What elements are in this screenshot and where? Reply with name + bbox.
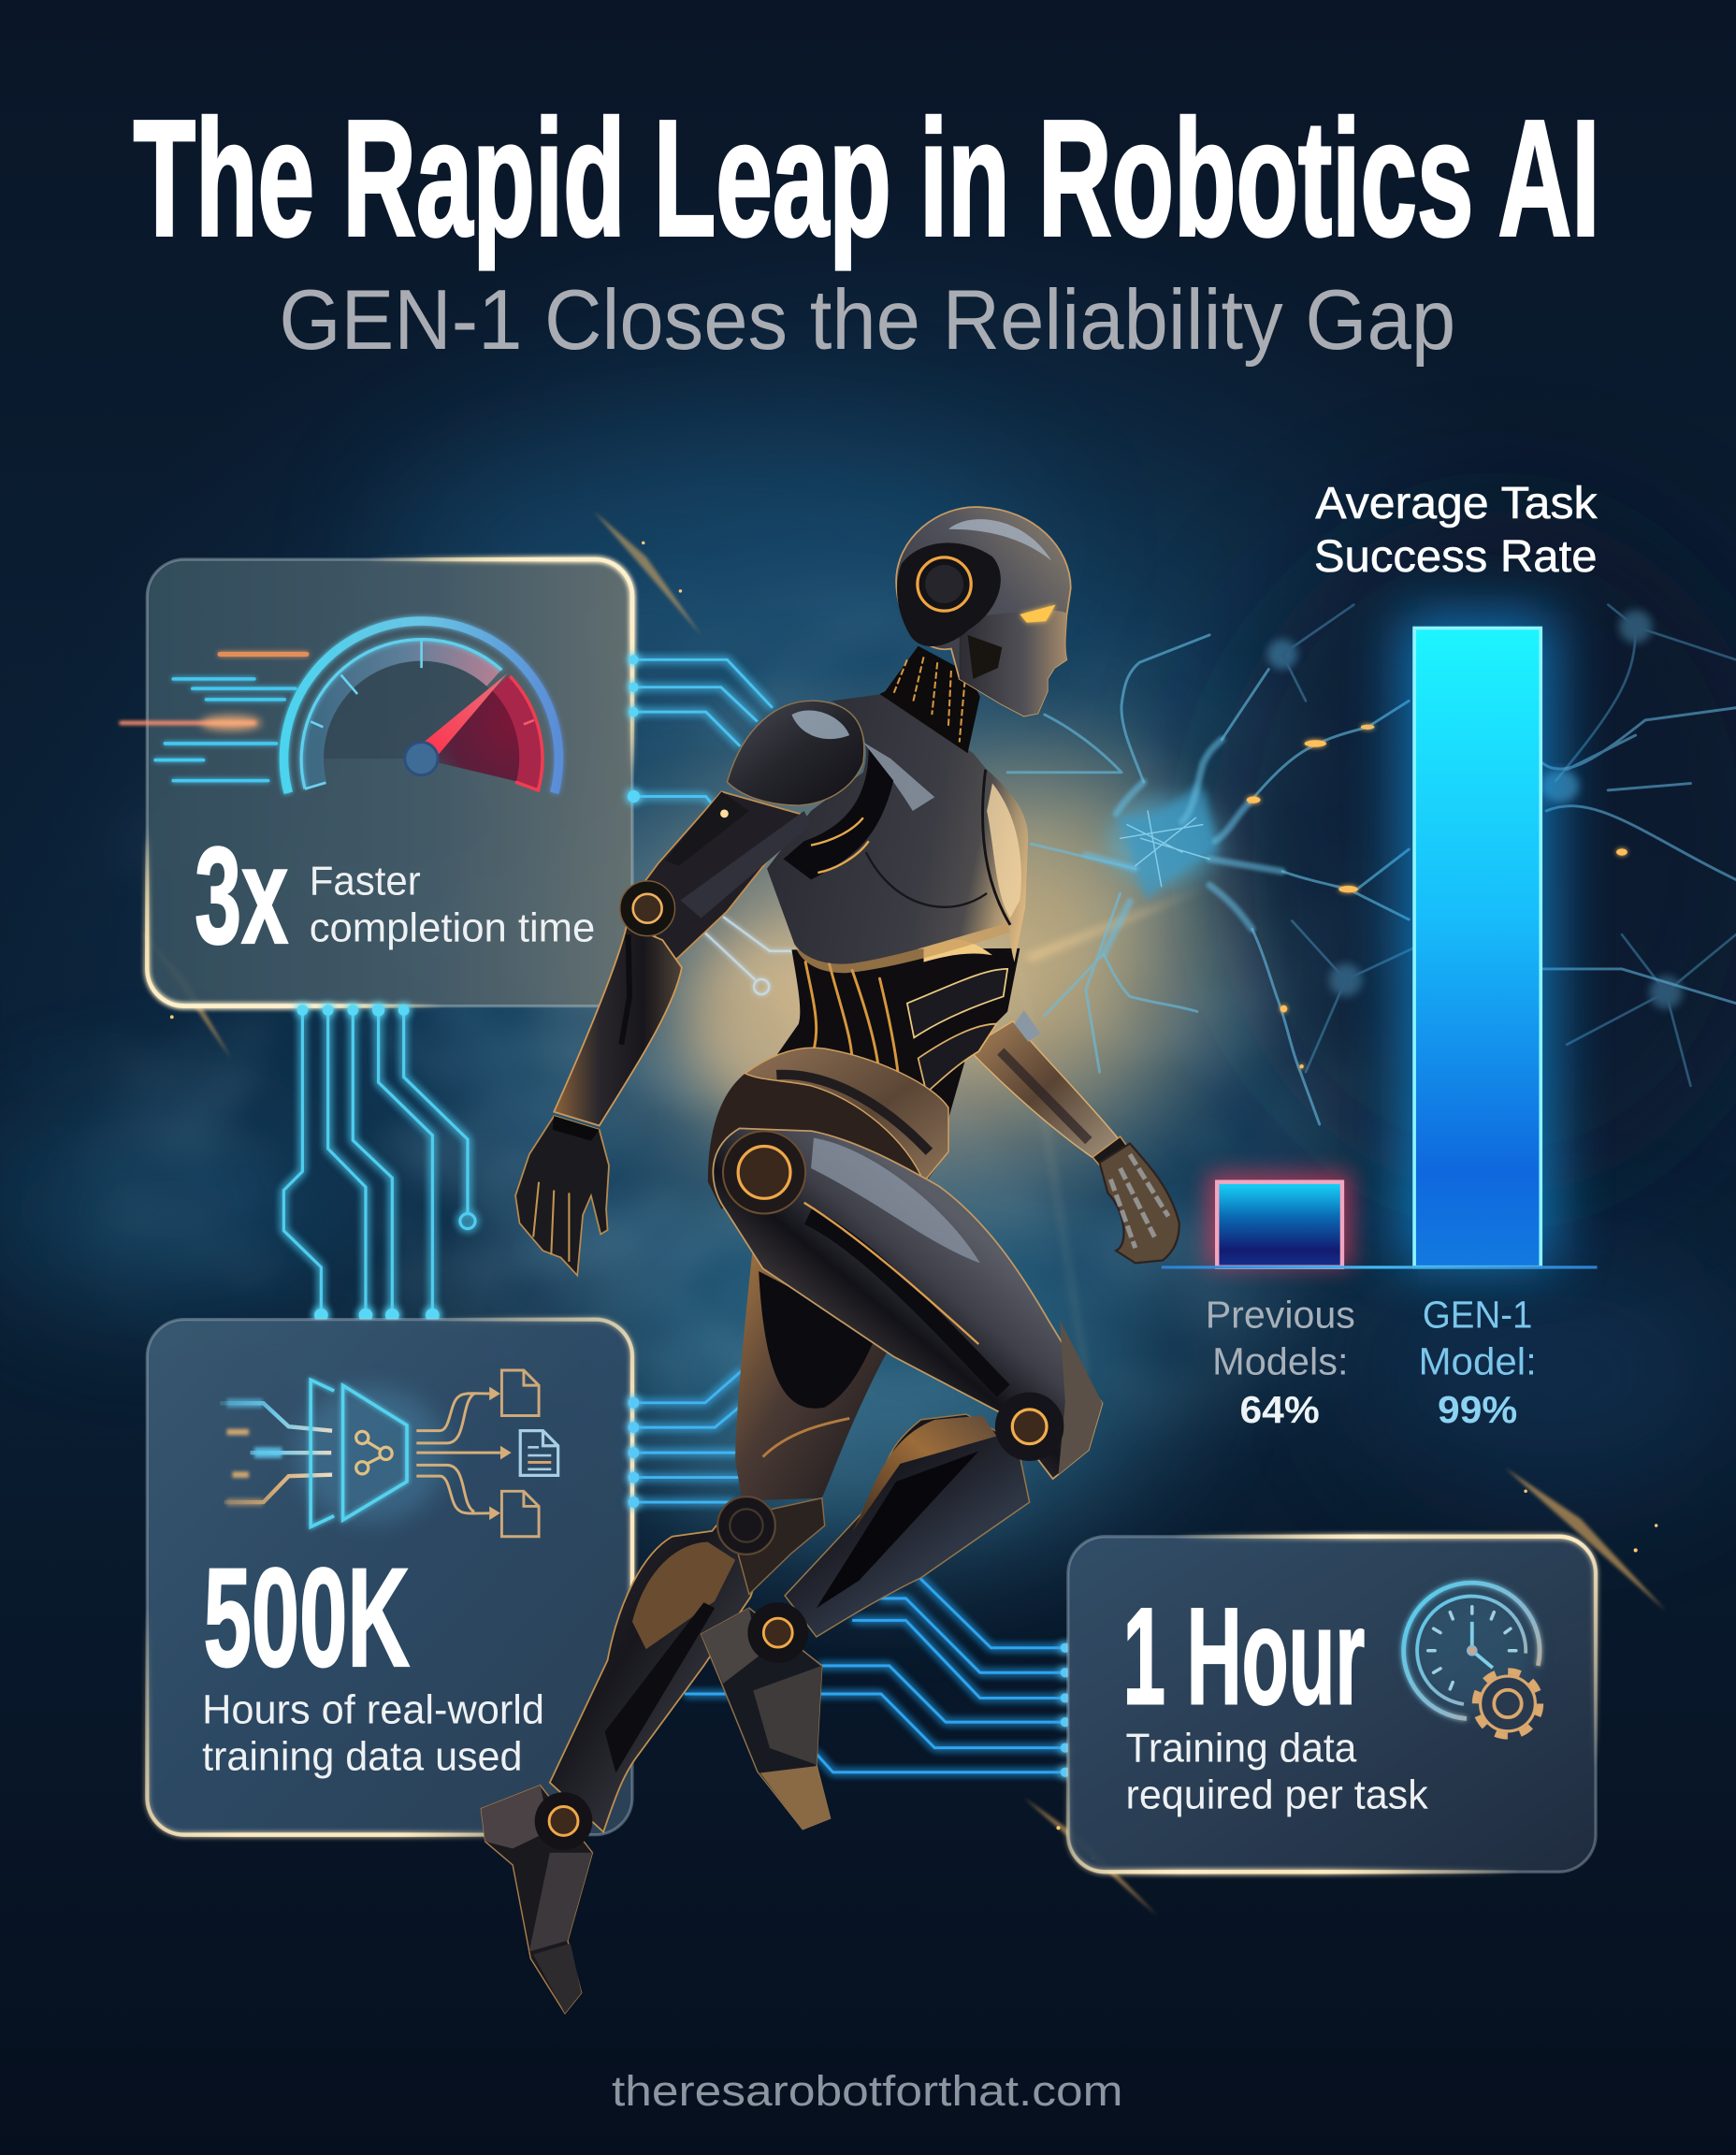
neuron: right of bar [1541, 708, 1736, 1004]
robot: ankle joint [747, 1602, 808, 1663]
footer url: theresarobotforthat.com [612, 2067, 1123, 2115]
label: hours of real-world training data: training data used [202, 1735, 522, 1780]
label: GEN-1 model: 99% [1438, 1388, 1517, 1431]
panel: 3x faster [121, 559, 632, 1006]
label: GEN-1 model: Model: [1418, 1339, 1537, 1382]
neuron sparks [1247, 725, 1628, 1068]
robot: knee joint [995, 1392, 1063, 1461]
label: faster completion time: Faster [310, 860, 421, 904]
label: previous models: Models: [1212, 1339, 1349, 1382]
icon: speedometer [284, 621, 558, 793]
robot: glowing eye [1020, 605, 1056, 623]
subtitle: GEN-1 Closes the Reliability Gap [279, 273, 1455, 368]
stat: 1 hour: 1 Hour [1123, 1580, 1365, 1733]
robot: far hand [1100, 1144, 1179, 1263]
robot: back foot [481, 1786, 592, 2014]
circuit: pale lines behind arm [701, 917, 800, 994]
robot figure [481, 507, 1179, 2014]
label: training data required per task [1126, 1727, 1428, 1818]
label: hours of real-world training data: Hours of real-world [202, 1688, 544, 1733]
label: training data required per task: required per task [1126, 1773, 1428, 1818]
robot: hip joint [723, 1131, 805, 1213]
stat: 3x: 3x [195, 819, 288, 973]
robot: shoulder [727, 701, 864, 805]
label: faster completion time: completion time [310, 906, 595, 951]
panel: 500K [147, 1320, 632, 1835]
bar: GEN-1 model 99% [1399, 613, 1555, 1267]
circuit: card three to robot [685, 1575, 1070, 1777]
label: GEN-1 model [1418, 1293, 1537, 1431]
chart title: Average Task [1315, 478, 1598, 528]
robot: near arm [515, 701, 893, 1276]
chart title: Success Rate [1314, 531, 1598, 582]
bar chart [1162, 478, 1598, 1431]
robot: head [896, 507, 1071, 716]
neuron: central [1007, 635, 1409, 1124]
robot: front foot [701, 1608, 831, 1830]
label: hours of real-world training data [202, 1688, 544, 1780]
label: training data required per task: Training data [1126, 1727, 1357, 1772]
circuit: card one to robot [628, 655, 773, 811]
robot: chest plate [767, 694, 1028, 964]
robot: back leg [481, 1244, 893, 2014]
robot: forearm [554, 925, 682, 1125]
label: faster completion time [310, 860, 595, 951]
icon: clock and gear [1404, 1583, 1541, 1736]
label: previous models: Previous [1206, 1293, 1355, 1336]
neuron: background cells [1267, 605, 1736, 1086]
label: GEN-1 model: GEN-1 [1423, 1293, 1532, 1336]
robot: elbow joint [620, 881, 675, 936]
circuit: card one to card two [283, 1004, 475, 1323]
flares around cards [141, 512, 1666, 1916]
robot: neck [879, 646, 980, 753]
icon: data funnel [220, 1370, 558, 1537]
robot: ear ring [905, 545, 983, 623]
robot: torso and pelvis [708, 694, 1028, 1209]
chart title [1314, 478, 1598, 582]
robot: near hand [515, 1116, 609, 1276]
icon: speed lines [121, 654, 307, 781]
robot: back knee joint [717, 1497, 775, 1555]
robot: far arm [968, 1010, 1179, 1263]
label: previous models: 64% [1239, 1388, 1320, 1431]
robot: back ankle joint [535, 1792, 592, 1850]
robot: pelvis [708, 1048, 948, 1209]
chart axis [1162, 1266, 1598, 1269]
neuron network [1007, 605, 1736, 1124]
robot: near leg [701, 1128, 1103, 1830]
label: previous models [1206, 1293, 1355, 1431]
robot: thigh [713, 1128, 1103, 1479]
circuit: card two to robot [629, 1370, 743, 1508]
bar: previous models 64% [1207, 1172, 1353, 1267]
panel: 1 hour [1068, 1537, 1596, 1872]
stat: 500K: 500K [204, 1539, 410, 1696]
